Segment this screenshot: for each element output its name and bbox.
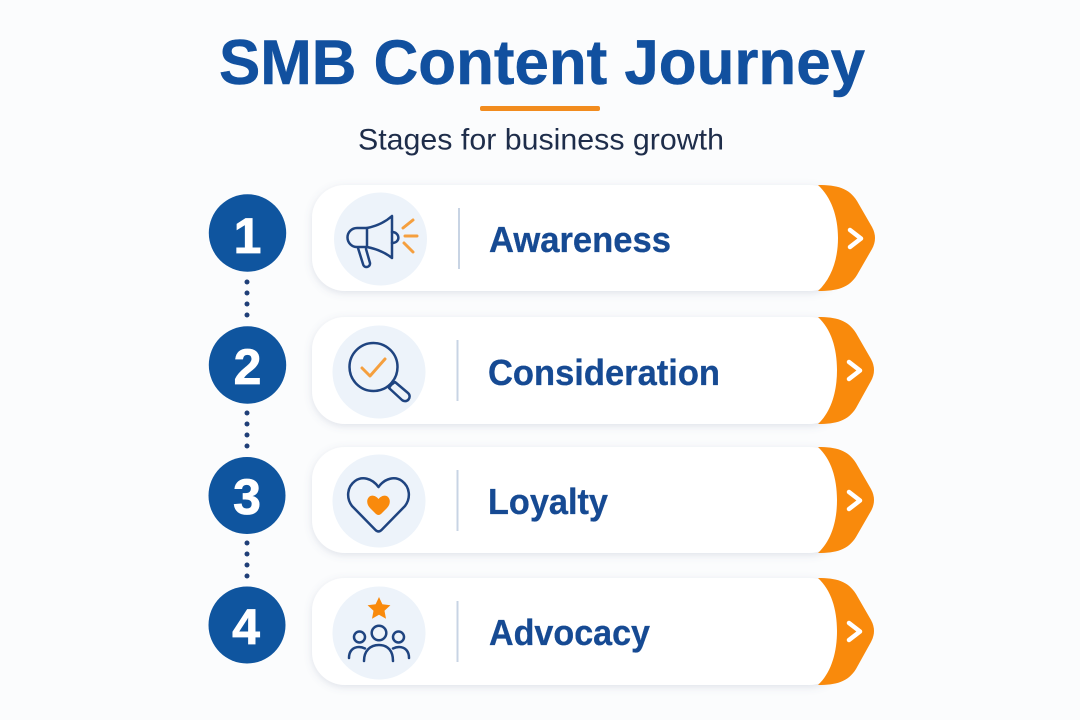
number badge 4: 4 [232,599,260,655]
card 4 [312,578,842,685]
icon: heart [332,454,426,548]
icon: megaphone [334,192,427,286]
label: Awareness: Awareness [489,219,671,260]
icon: magnifier with check [332,326,426,418]
number badge 3 [208,457,286,534]
card 1 [312,185,842,291]
title: SMB Content Journey [219,28,865,98]
number badge 2 [209,326,286,404]
connector dots 2 to 3 [244,410,250,448]
arrow 2 [849,362,860,379]
connector dots 3 to 4 [244,540,250,578]
stage 1: awareness [209,185,875,291]
divider 4 [456,601,458,662]
chevron tab 2 [818,317,874,424]
label: Loyalty: Loyalty [488,481,608,522]
arrow 4 [849,623,860,640]
divider 1 [458,208,460,269]
card 3 [312,447,842,553]
stage 4: advocacy [208,578,874,685]
card 2 [312,317,842,424]
number badge 3: 3 [233,469,261,525]
icon: people with star [332,586,426,680]
number badge 1: 1 [234,208,261,264]
chevron tab 4 [818,578,874,685]
arrow 3 [849,492,860,509]
number badge 1 [209,194,286,272]
divider 3 [456,470,458,531]
stage 3: loyalty [208,447,874,553]
connector dots 1 to 2 [244,280,250,318]
chevron tab 1 [818,185,875,291]
label: Advocacy: Advocacy [489,612,650,653]
arrow 1 [850,230,861,247]
title underline [480,106,600,111]
divider 2 [456,340,458,401]
stage 2: consideration [209,317,874,424]
number badge 4 [208,586,286,664]
label: Consideration: Consideration [488,352,720,393]
number badge 2: 2 [234,339,261,395]
subtitle: Stages for business growth [358,124,724,156]
chevron tab 3 [818,447,874,553]
